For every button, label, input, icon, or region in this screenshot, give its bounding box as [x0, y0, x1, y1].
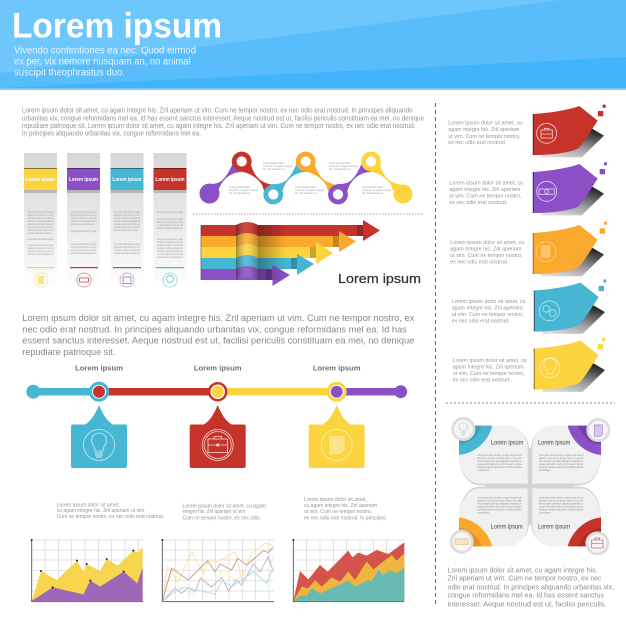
petal: bottom right: aperiam ut vim cum ne tempor nostro ex nec odio: [539, 499, 584, 503]
card: red: urbanitas congue reformidans mel: [157, 249, 183, 253]
wave ribbon segments: [207, 164, 402, 191]
tag text: agam integre his. Zril aperiam: [450, 246, 522, 252]
timeline headings: Lorem ipsum: [194, 364, 242, 372]
tag text: [452, 299, 526, 324]
petal: top left: interesset aeque nostrud est ut facilisi periculis: [477, 465, 522, 469]
tag text: ex nec odio erat nostrud.: [449, 200, 508, 206]
chart: wave connector: [200, 154, 412, 204]
card: purple: nostrud in principes aliquando vix: [70, 219, 97, 223]
timeline headings: Lorem ipsum: [75, 364, 123, 372]
tag text: [453, 358, 527, 383]
tag text: Lorem ipsum dolor sit amet, cu: [453, 358, 527, 364]
card: cyan: ne tempor nostro ex nec odio erat: [114, 216, 140, 220]
wave captions: sit amet, cu agam integre: [329, 164, 359, 168]
chart: stacked arrows: [200, 220, 380, 286]
petal: bottom right: constituam: [539, 511, 551, 515]
wave captions: Lorem ipsum dolor: [362, 185, 384, 189]
petal: bottom right: Lorem ipsum dolor sit amet, cu agam integre his zril: [539, 496, 584, 500]
middle text block: [22, 313, 414, 358]
wave captions: Lorem ipsum dolor: [295, 185, 317, 189]
tag text: agam integre his. Zril aperiam: [452, 305, 523, 311]
tag text: ut vim. Cum ne tempor nostro,: [452, 312, 524, 318]
petal: top right: interesset aeque nostrud est ut facilisi periculis: [539, 465, 584, 469]
petal: bottom right: congue reformidans mel ea id has essent sanctus: [539, 505, 584, 509]
tag shape: [533, 222, 607, 276]
panel: yellow tag: [453, 338, 605, 392]
panel: red tag: [448, 105, 606, 157]
petal: bottom left: constituam: [477, 511, 489, 515]
caption: chart 1: cu agam integre his. Zril aperiam ut vim.: [57, 508, 146, 514]
tag text: agam integre his. Zril aperiam: [449, 187, 521, 193]
timeline: [26, 364, 407, 468]
card: cyan: integre his zril aperiam ut vim cum: [114, 213, 140, 217]
middle text block: nec odio erat nostrud. In principes aliquando urbanitas vix, congue reformidans mel ea. Id has: [22, 324, 407, 335]
caption: chart 2: integre his. Zril aperiam ut vim.: [182, 509, 246, 515]
header subtitle: suscipit theophrastus duo.: [14, 68, 125, 78]
wave captions: his. Zril aperiam ut: [329, 167, 351, 171]
petal backing: [459, 427, 601, 545]
card: cyan: Lorem ipsum: [112, 177, 142, 183]
petal: bottom left: congue reformidans mel ea id has essent sanctus: [477, 505, 522, 509]
petal: top right: [532, 418, 610, 484]
card: yellow: nostrud in principes aliquando vix: [28, 219, 54, 223]
timeline headings: Lorem ipsum: [313, 364, 361, 372]
card: purple: nostrud in principes aliquando vix: [70, 251, 97, 255]
title: Lorem ipsum: [12, 6, 222, 45]
caption: chart 3: ex nec odio erat nostrud. In principes.: [304, 516, 387, 522]
node: cyan ring: [266, 187, 281, 202]
tag text: ut vim. Cum ne tempor nostro,: [450, 253, 523, 259]
petal: bottom right: Lorem ipsum: [538, 524, 570, 531]
card: red: integre his zril aperiam ut vim cum: [157, 240, 183, 244]
card: cyan: ne tempor nostro ex nec odio erat: [114, 248, 140, 252]
wave captions: sit amet, cu agam integre: [229, 188, 259, 192]
tag text: Lorem ipsum dolor sit amet, cu: [452, 299, 526, 305]
caption: chart 1: Cum ne tempor nostro, ex nec odio erat nostrud.: [57, 514, 164, 520]
card: purple: Lorem ipsum: [69, 177, 99, 183]
timeline bars: [26, 385, 407, 399]
card: red: nostrud in principes aliquando vix: [157, 226, 183, 230]
intro text block: [22, 107, 424, 138]
petal: top right: constituam: [539, 468, 551, 472]
petal: top right: Lorem ipsum: [538, 439, 571, 446]
intro text block: In principes aliquando urbanitas vix, congue reformidans mel ea.: [22, 131, 201, 138]
caption: chart 3: Lorem ipsum dolor sit amet,: [304, 497, 367, 503]
arrow: red: [201, 220, 380, 241]
middle text block: repudiare patrioque sit.: [22, 347, 115, 358]
petal: top right: congue reformidans mel ea id has essent sanctus: [539, 462, 584, 466]
bottom right text block: odio erat nostrud. In principes aliquando urbanitas vix,: [448, 582, 614, 591]
card: cyan: nostrud in principes aliquando vix: [114, 251, 140, 255]
card: purple: ne tempor nostro ex nec odio erat: [70, 248, 97, 252]
card: yellow: ea id has essent sanctus interesset: [28, 225, 54, 229]
card: purple: [67, 153, 100, 288]
wave captions: Lorem ipsum dolor: [329, 161, 351, 165]
intro text block: urbanitas vix, congue reformidans mel ea. Id has essent sanctus interesset. Aeque nostrud est ut, facilisi periculis constituam ea mei, no denique: [22, 115, 424, 122]
wave captions: Lorem ipsum dolor: [229, 185, 251, 189]
tag text: [450, 240, 524, 265]
petal: bottom left: aperiam ut vim cum ne tempor nostro ex nec odio: [477, 499, 522, 503]
card: cyan: aeque nostrud est ut facilisi: [114, 228, 138, 232]
header subtitle: [14, 46, 196, 78]
card: cyan: [110, 153, 144, 288]
header subtitle: Vivendo contentiones ea nec. Quod eirmod: [14, 46, 196, 56]
card: red: ne tempor nostro ex nec odio erat: [157, 243, 183, 247]
caption: chart 3: [304, 497, 387, 522]
node: purple ring: [330, 187, 346, 202]
tag shape: [533, 105, 606, 157]
tag text: Lorem ipsum dolor sit amet, cu: [450, 240, 524, 246]
arrow shadows: [258, 225, 363, 280]
card: cyan: urbanitas congue reformidans mel: [114, 222, 140, 226]
card: red: aeque nostrud est ut facilisi ea mei: [157, 255, 183, 259]
icon: lightbulb: [84, 430, 114, 460]
wave captions: his. Zril aperiam ut: [295, 191, 317, 195]
card: yellow: integre his zril aperiam ut vim cum: [28, 213, 54, 217]
callout: document: [309, 405, 365, 468]
tag text: ex nec odio erat nostrud.: [450, 259, 509, 265]
card: yellow: Lorem ipsum dolor sit amet cu agam: [28, 237, 54, 241]
caption: chart 2: Cum ne tempor nostro, ex nec odio.: [182, 516, 261, 522]
tag text: ex nec odio erat nostrud.: [452, 318, 510, 324]
petal: bottom right: erat nostrud in principes aliquando urbanitas vix: [539, 502, 584, 506]
card: purple: Lorem ipsum dolor sit amet cu agam: [70, 229, 96, 233]
tag text: ex nec odio erat nostrud.: [453, 377, 511, 383]
card: yellow: ne tempor nostro ex nec odio erat: [28, 216, 54, 220]
card: red: Lorem ipsum dolor sit amet cu agam: [157, 217, 183, 221]
card: red: integre his zril aperiam ut vim cum: [157, 220, 183, 224]
timeline headings: [75, 364, 361, 372]
card: yellow: Lorem ipsum: [26, 177, 56, 183]
petal: top left: Lorem ipsum: [491, 439, 524, 446]
card: yellow: aeque nostrud est ut facilisi ea mei: [28, 228, 54, 232]
card: purple: Lorem ipsum dolor sit amet cu agam: [70, 210, 96, 214]
petal: top left: erat nostrud in principes aliquando urbanitas vix: [477, 459, 522, 463]
card: purple: integre his zril aperiam ut vim cum: [70, 213, 96, 217]
ribbon fold: [236, 222, 258, 280]
tag text: [448, 120, 522, 146]
intro text block: Lorem ipsum dolor sit amet, cu agam integre his. Zril aperiam ut vim. Cum ne tempor nostro, ex nec odio erat nostrud. In principes aliquando: [22, 107, 413, 114]
chart: area two series: [31, 539, 143, 602]
tag text: agam integre his. Zril aperiam: [448, 127, 520, 133]
arrows heading: Lorem ipsum: [338, 271, 421, 286]
petal: top right: aperiam ut vim cum ne tempor nostro ex nec odio: [539, 456, 584, 460]
bottom right text block: interesset. Aeque nostrud est ut, facilisi periculis.: [448, 600, 606, 608]
tag text: ex nec odio erat nostrud.: [448, 140, 507, 146]
tag shape: [533, 162, 607, 215]
timeline node 2: [209, 383, 226, 400]
panel: cyan tag: [452, 279, 606, 334]
chart: line series: [161, 539, 274, 602]
card: yellow: Lorem ipsum dolor sit amet cu agam: [28, 243, 54, 247]
card: purple: ne tempor nostro ex nec odio erat: [70, 216, 97, 220]
wave captions: his. Zril aperiam ut: [263, 167, 285, 171]
petal: top right: erat nostrud in principes aliquando urbanitas vix: [539, 459, 584, 463]
tag shape: [534, 279, 606, 334]
card: red: [154, 153, 186, 288]
card: cyan: Lorem ipsum dolor sit amet cu agam: [114, 242, 140, 246]
caption: chart 2: [182, 504, 266, 522]
wave captions: his. Zril aperiam ut: [362, 191, 384, 195]
petal: bottom left: erat nostrud in principes aliquando urbanitas vix: [477, 502, 522, 506]
tag text: ut vim. Cum ne tempor nostro,: [449, 194, 522, 200]
panel: column cards: [24, 153, 186, 288]
card: purple: Lorem ipsum dolor sit amet cu agam: [70, 242, 96, 246]
middle text block: Lorem ipsum dolor sit amet, cu agam integre his. Zril aperiam ut vim. Cum ne tempor nostro, ex: [22, 313, 414, 324]
header subtitle: ex per, vix nemore nusquam an, no animal: [14, 56, 190, 68]
card: yellow: Lorem ipsum dolor sit amet cu agam: [28, 210, 54, 214]
petal: bottom right: interesset aeque nostrud est ut facilisi periculis: [539, 508, 584, 512]
card: purple: integre his zril aperiam ut vim cum: [70, 245, 96, 249]
arrow: yellow: [201, 242, 333, 264]
petal: top left: constituam: [477, 468, 489, 472]
node: yellow ring: [364, 154, 378, 169]
tag text: Lorem ipsum dolor sit amet, cu: [448, 120, 522, 126]
caption: chart 1: [57, 502, 164, 520]
intro text block: repudiare patrioque sit. Lorem ipsum dolor sit amet, cu agam integre his. Zril aperiam ut vim. Cum ne tempor nostro, ex nec odio erat nostrud.: [22, 123, 416, 130]
caption: chart 3: ut vim. Cum ne tempor nostro,: [304, 509, 372, 515]
card: red: nostrud in principes aliquando vix: [157, 246, 183, 250]
node: red ring: [234, 154, 249, 169]
petal: bottom left: Lorem ipsum dolor sit amet, cu agam integre his zril: [477, 496, 522, 500]
tag text: ut vim. Cum ne tempor nostro,: [448, 134, 521, 140]
node: orange ring: [298, 154, 313, 169]
arrow: orange: [201, 231, 356, 252]
wave captions: sit amet, cu agam integre: [362, 188, 392, 192]
arrow: purple: [201, 265, 290, 286]
card: red: Lorem ipsum: [156, 177, 185, 183]
petal: bottom left: [450, 488, 528, 554]
card: red: ea id has essent sanctus interesset: [157, 252, 183, 256]
card: red: ne tempor nostro ex nec odio erat: [157, 223, 183, 227]
panel: quad petals: [450, 417, 610, 555]
petal: top left: Lorem ipsum dolor sit amet, cu agam integre his zril: [477, 453, 522, 457]
petal: top left: congue reformidans mel ea id has essent sanctus: [477, 462, 522, 466]
icon: briefcase: [202, 430, 233, 460]
arrow: cyan: [201, 254, 314, 275]
card: cyan: nostrud in principes aliquando vix: [114, 219, 140, 223]
node: purple drop: [200, 184, 220, 204]
card: yellow: nostrud in principes aliquando vix: [28, 252, 54, 256]
tag text: agam integre his. Zril aperiam: [453, 364, 524, 370]
petal: bottom left: Lorem ipsum: [491, 524, 523, 531]
wave captions: his. Zril aperiam ut: [229, 191, 251, 195]
callout: briefcase: [190, 405, 246, 468]
card: yellow: [24, 153, 57, 288]
card: purple: urbanitas congue reformidans mel: [70, 222, 95, 226]
caption: chart 1: Lorem ipsum dolor sit amet,: [57, 502, 120, 508]
header banner: [0, 0, 626, 90]
timeline node 1: [90, 383, 108, 400]
tag shape: [534, 338, 605, 392]
card: cyan: ea id has essent sanctus interesset: [114, 225, 140, 229]
wave captions: Lorem ipsum dolor: [263, 161, 285, 165]
tag text: ut vim. Cum ne tempor nostro,: [453, 371, 525, 377]
chart: stacked area: [292, 539, 404, 602]
caption: chart 3: cu agam integre his. Zril aperiam: [304, 503, 377, 509]
wave captions: [229, 161, 392, 195]
card: yellow: ne tempor nostro ex nec odio erat: [28, 249, 54, 253]
tag text: Lorem ipsum dolor sit amet, cu: [449, 180, 523, 186]
card: red: Lorem ipsum dolor sit amet cu agam: [157, 210, 183, 214]
wave captions: sit amet, cu agam integre: [295, 188, 325, 192]
card: cyan: integre his zril aperiam ut vim cum: [114, 245, 140, 249]
bottom right text block: Lorem ipsum dolor sit amet, cu agam integre his.: [448, 566, 598, 574]
middle text block: essent sanctus interesset. Aeque nostrud est ut, facilisi periculis constituam ea mei, no denique: [22, 336, 414, 346]
card: yellow: integre his zril aperiam ut vim cum: [28, 246, 54, 250]
icon: document: [321, 430, 352, 460]
node: yellow drop: [394, 184, 412, 204]
panel: orange tag: [450, 222, 607, 276]
bottom right text block: [448, 566, 614, 608]
bottom right text block: congue reformidans mel ea. Id has essent sanctus: [448, 591, 604, 600]
card: yellow: periculis constituam no denique: [28, 231, 52, 235]
panel: purple tag: [449, 162, 607, 215]
caption: chart 2: Lorem ipsum dolor sit amet, cu agam: [182, 504, 266, 510]
petal: top right: Lorem ipsum dolor sit amet, cu agam integre his zril: [539, 453, 584, 457]
petal: bottom right: [532, 488, 609, 555]
card: cyan: Lorem ipsum dolor sit amet cu agam: [114, 210, 140, 214]
petal: top left: [451, 417, 528, 484]
petal: bottom left: interesset aeque nostrud est ut facilisi periculis: [477, 508, 522, 512]
timeline node 3: [328, 383, 345, 400]
tag text: [449, 180, 523, 206]
callout: lightbulb: [71, 405, 127, 468]
petal: top left: aperiam ut vim cum ne tempor nostro ex nec odio: [477, 456, 522, 460]
card: yellow: urbanitas congue reformidans mel: [28, 222, 54, 226]
wave captions: sit amet, cu agam integre: [263, 164, 293, 168]
card: red: Lorem ipsum dolor sit amet cu agam: [157, 237, 183, 241]
bottom right text block: Zril aperiam ut vim. Cum ne tempor nostro, ex nec: [448, 574, 602, 583]
